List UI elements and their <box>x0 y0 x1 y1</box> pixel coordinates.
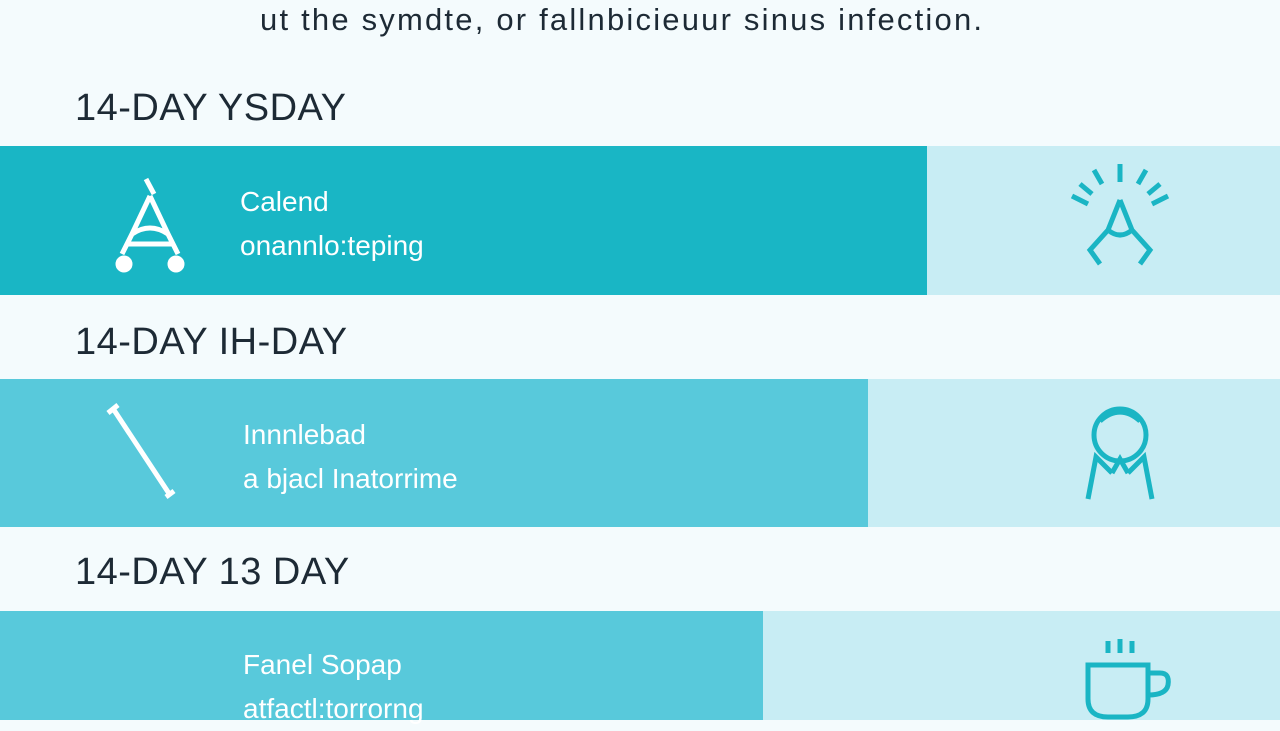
text 1: onannlo:teping <box>240 230 424 261</box>
intro text: ut the symdte, or fallnbicieuur sinus infection. <box>260 2 984 37</box>
bar 2 <box>0 379 868 527</box>
text 2 <box>243 419 458 494</box>
heading 1: 14-DAY YSDAY <box>75 87 346 129</box>
text 2: a bjacl Inatorrime <box>243 463 458 494</box>
text 3: atfactl:torrorng <box>243 693 424 724</box>
text 1 <box>240 186 424 261</box>
panel 1 <box>0 146 1280 295</box>
icon: nose spray <box>116 178 184 272</box>
icon: sneezing <box>1070 164 1170 266</box>
bar 3 <box>0 611 763 720</box>
heading 3: 14-DAY 13 DAY <box>75 551 350 593</box>
text 2: Innnlebad <box>243 419 366 450</box>
icon: face in hands <box>1086 406 1154 500</box>
panel 3 <box>0 611 1280 720</box>
text 3: Fanel Sopap <box>243 649 402 680</box>
text 1: Calend <box>240 186 329 217</box>
text 3 <box>243 649 424 724</box>
bar 1 <box>0 146 927 295</box>
panel 2 <box>0 379 1280 527</box>
icon: hot cup <box>1086 639 1171 720</box>
heading 2: 14-DAY IH-DAY <box>75 321 348 363</box>
icon: thermometer <box>106 403 176 499</box>
